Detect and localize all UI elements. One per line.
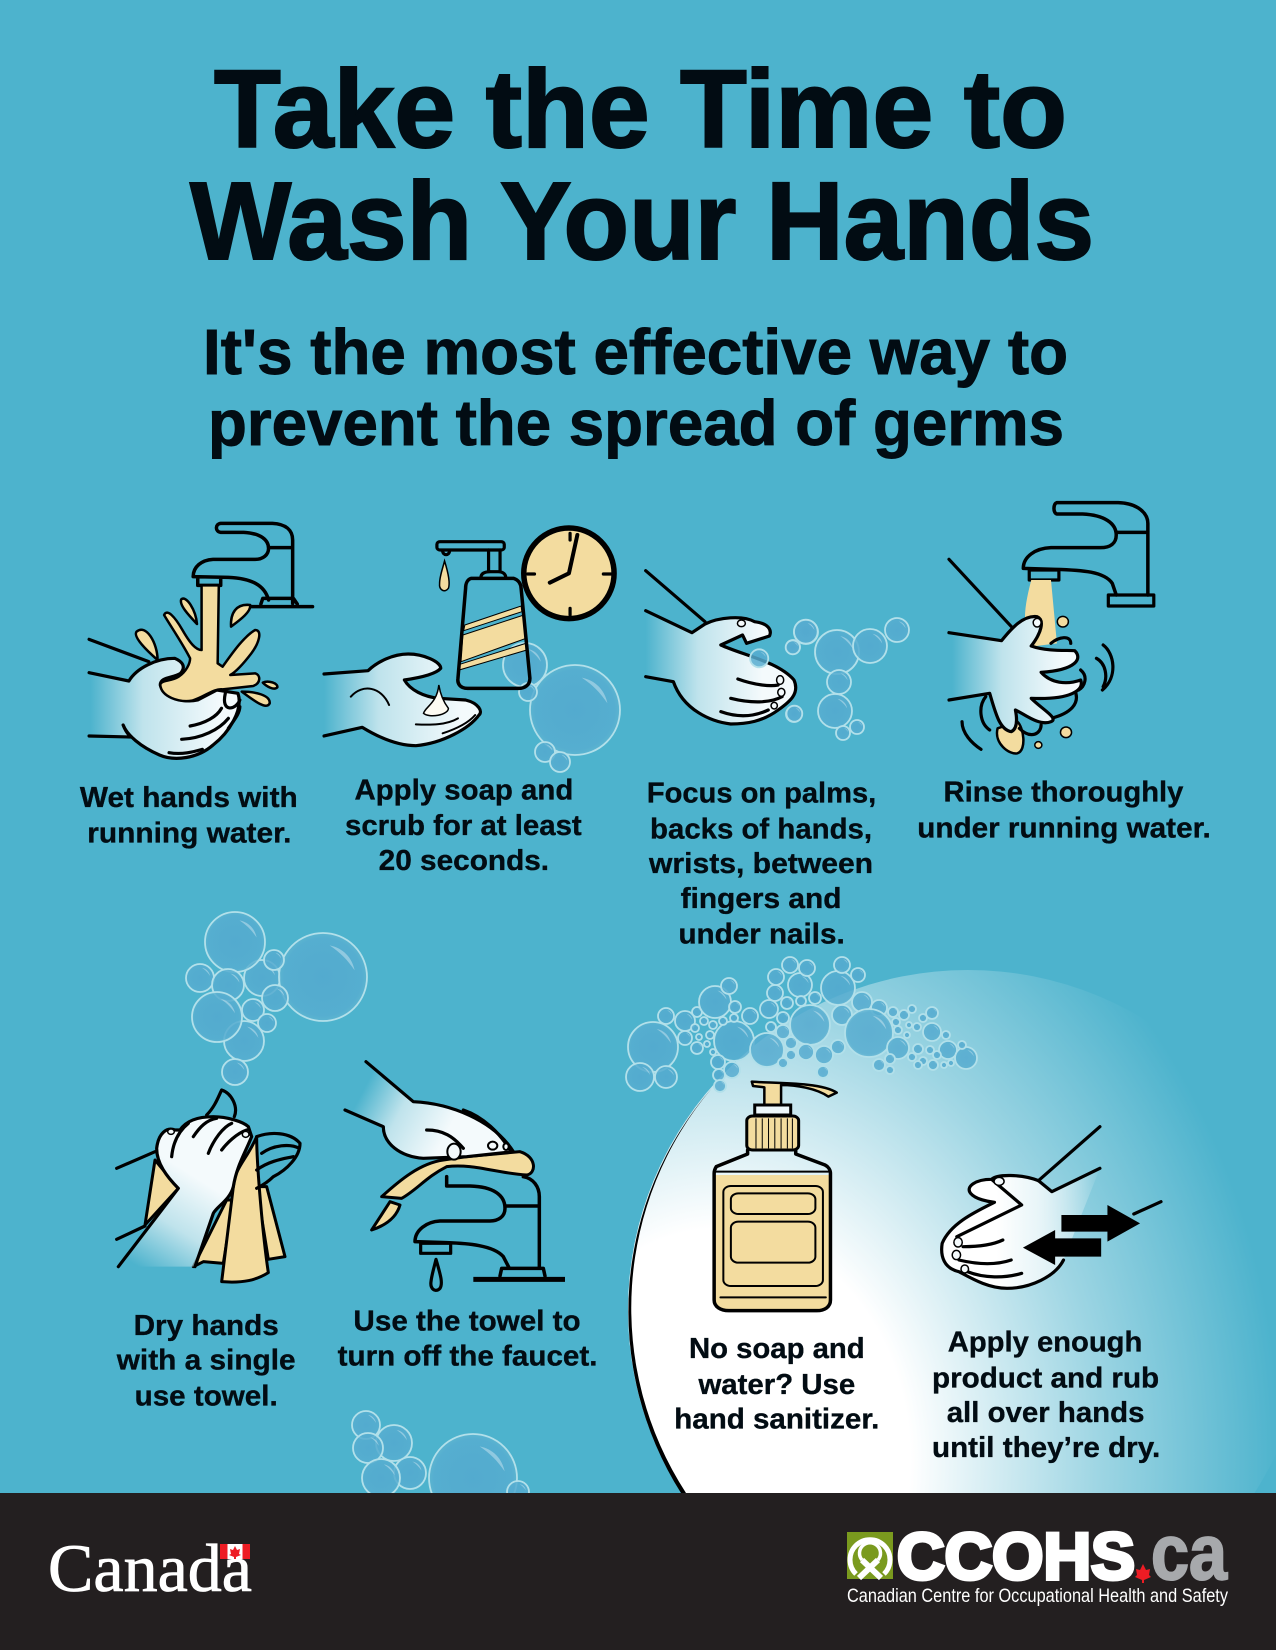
label: step 3: wrists, between bbox=[648, 848, 873, 880]
label: step 3: under nails. bbox=[678, 919, 845, 951]
label: apply product: until they’re dry. bbox=[932, 1432, 1160, 1464]
droplets bbox=[1035, 616, 1072, 748]
label: step 3 bbox=[647, 778, 876, 951]
label: step 1 bbox=[80, 782, 298, 850]
soap dollop bbox=[424, 685, 448, 716]
bubbles on hand bbox=[750, 620, 818, 722]
water drop bbox=[431, 1259, 441, 1290]
label: apply product: Apply enough bbox=[948, 1327, 1142, 1359]
illustration: rubbing hands with arrows bbox=[942, 1127, 1161, 1288]
label: step 2: 20 seconds. bbox=[379, 845, 549, 877]
water droplets bbox=[136, 599, 277, 706]
collar bbox=[755, 1105, 791, 1115]
label: sanitizer: hand sanitizer. bbox=[674, 1403, 879, 1435]
label: step 2: Apply soap and bbox=[354, 774, 573, 806]
front hand bbox=[949, 617, 1081, 732]
logo: Canada wordmark: Canada bbox=[48, 1530, 252, 1606]
step labels bbox=[80, 774, 1211, 1464]
illustration: step 1 wet hands under faucet bbox=[89, 523, 313, 758]
label: step 6 bbox=[338, 1306, 597, 1372]
label: step 2 bbox=[345, 774, 582, 877]
label: step 5: Dry hands bbox=[134, 1310, 279, 1342]
soap pump bbox=[437, 542, 504, 550]
logo mark bbox=[847, 1532, 893, 1579]
subtitle: prevent the spread of germs bbox=[208, 387, 1064, 459]
finger lines bbox=[89, 639, 240, 753]
bottle outline bbox=[714, 1150, 830, 1311]
label: step 5 bbox=[116, 1310, 296, 1412]
front hand bbox=[118, 1117, 252, 1267]
label: step 3: Focus on palms, bbox=[647, 778, 876, 810]
subtitle bbox=[203, 316, 1068, 459]
hand bbox=[345, 1062, 513, 1158]
bubbles: step 2 bbox=[503, 643, 620, 772]
illustration: step 5 dry hands bbox=[117, 1090, 300, 1282]
label: apply product bbox=[932, 1327, 1160, 1464]
water splash bbox=[160, 585, 259, 701]
panel: hand sanitizer background bbox=[628, 970, 1276, 1650]
back hand bbox=[981, 638, 1085, 735]
logo: CCOHS: CCOHS bbox=[897, 1519, 1135, 1593]
label: step 5: with a single bbox=[116, 1345, 296, 1377]
running water bbox=[1025, 580, 1057, 647]
illustration: sanitizer bottle bbox=[714, 1082, 837, 1311]
label: sanitizer: water? Use bbox=[697, 1369, 855, 1401]
soap drop bbox=[440, 561, 449, 591]
bottle stripes bbox=[459, 606, 527, 670]
bubbles: step 3 bbox=[786, 618, 909, 740]
title: Wash Your Hands bbox=[190, 160, 1094, 283]
label: step 5: use towel. bbox=[135, 1380, 278, 1412]
label: apply product: all over hands bbox=[947, 1397, 1144, 1429]
label: sanitizer: No soap and bbox=[689, 1333, 865, 1365]
label: step 6: Use the towel to bbox=[353, 1306, 581, 1338]
towel bbox=[372, 1152, 533, 1230]
faucet bbox=[1023, 503, 1148, 595]
label: step 1: Wet hands with bbox=[80, 782, 298, 814]
illustration: step 3 scrub palms bbox=[646, 571, 818, 724]
clock bbox=[524, 528, 614, 619]
arrow left bbox=[1023, 1230, 1101, 1265]
hand bbox=[89, 658, 239, 758]
label: step 4 bbox=[917, 777, 1211, 844]
fingernails bbox=[737, 620, 785, 709]
illustration: step 6 towel and faucet bbox=[345, 1062, 565, 1290]
ribbed cap bbox=[747, 1116, 799, 1150]
arrow right bbox=[1061, 1205, 1140, 1242]
label: step 6: turn off the faucet. bbox=[338, 1340, 597, 1372]
label: apply product: product and rub bbox=[932, 1362, 1159, 1394]
liquid bbox=[715, 1175, 829, 1310]
clock hands bbox=[550, 535, 577, 583]
title bbox=[190, 48, 1094, 283]
footer bar bbox=[0, 1493, 1276, 1650]
bottle label bbox=[716, 1172, 828, 1297]
subtitle: It's the most effective way to bbox=[203, 316, 1068, 388]
logo: CCOHS: ca bbox=[1151, 1508, 1228, 1596]
bubbles: above towel bbox=[186, 912, 367, 1085]
illustration: step 4 rinse bbox=[949, 503, 1154, 753]
label: sanitizer bbox=[674, 1333, 879, 1435]
label: step 4: Rinse thoroughly bbox=[944, 777, 1183, 809]
label: step 3: fingers and bbox=[681, 883, 842, 915]
logo: CCOHS bbox=[847, 1508, 1228, 1607]
towel bbox=[145, 1137, 285, 1282]
label: step 4: under running water. bbox=[917, 812, 1211, 844]
label: step 3: backs of hands, bbox=[650, 813, 872, 845]
maple leaf bbox=[1135, 1564, 1151, 1583]
bottle outline bbox=[458, 578, 530, 688]
flag bbox=[220, 1544, 250, 1559]
pump head bbox=[752, 1082, 837, 1105]
label: step 2: scrub for at least bbox=[345, 810, 582, 842]
label: step 1: running water. bbox=[87, 818, 291, 850]
bubbles: bottom bbox=[352, 1411, 529, 1522]
faucet bbox=[415, 1177, 545, 1276]
title: Take the Time to bbox=[214, 48, 1067, 171]
back hand bbox=[207, 1090, 300, 1188]
illustration: step 2 soap and clock bbox=[324, 528, 614, 746]
open hand bbox=[324, 654, 480, 746]
faucet bbox=[193, 523, 313, 607]
bubbles: foam above sanitizer bbox=[626, 957, 977, 1092]
